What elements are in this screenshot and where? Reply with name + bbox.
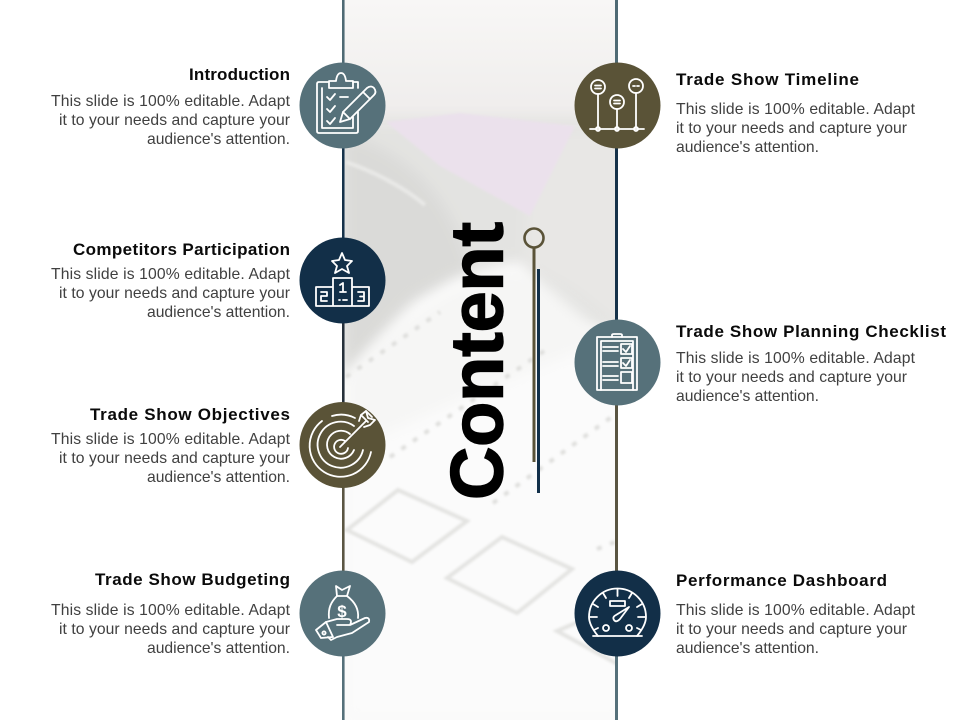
- body text: it to your needs and capture your: [676, 120, 907, 137]
- heading: Trade Show Budgeting: Trade Show Budgeting: [95, 570, 290, 589]
- heading: Trade Show Objectives: Trade Show Objectives: [90, 405, 290, 424]
- body text: audience's attention.: [676, 640, 819, 657]
- title accent: navy line: [537, 269, 540, 493]
- item: Trade Show Planning Checklist: [574, 320, 946, 406]
- body text: [51, 266, 291, 321]
- body text: it to your needs and capture your: [676, 621, 907, 638]
- item: Trade Show Timeline: [574, 62, 916, 156]
- heading: Trade Show Timeline: Trade Show Timeline: [676, 70, 859, 89]
- body text: audience's attention.: [676, 388, 819, 405]
- body text: This slide is 100% editable. Adapt: [51, 602, 291, 619]
- body text: [676, 350, 916, 405]
- item: Trade Show Objectives: [51, 402, 386, 488]
- body text: This slide is 100% editable. Adapt: [51, 266, 291, 283]
- icon: hand holding money bag: $: [337, 602, 347, 621]
- heading: Competitors Participation: Competitors Participation: [73, 240, 290, 259]
- icon: hand holding money bag: [300, 570, 386, 656]
- body text: it to your needs and capture your: [59, 285, 290, 302]
- body text: [51, 602, 291, 657]
- body text: it to your needs and capture your: [676, 369, 907, 386]
- heading: Trade Show Planning Checklist: Trade Show Planning Checklist: [676, 322, 946, 341]
- item: Trade Show Budgeting: [51, 570, 386, 657]
- icon: clipboard and pencil: [300, 62, 386, 148]
- item: Performance Dashboard: [574, 570, 916, 657]
- item: Introduction: [51, 62, 386, 148]
- icon: speedometer: [574, 570, 660, 656]
- body text: [51, 431, 291, 486]
- title: Content: Content: [436, 222, 518, 500]
- body text: This slide is 100% editable. Adapt: [676, 101, 916, 118]
- body text: it to your needs and capture your: [59, 112, 290, 129]
- title accent: ring and pin line: [524, 228, 544, 462]
- body text: This slide is 100% editable. Adapt: [51, 431, 291, 448]
- body text: audience's attention.: [147, 304, 290, 321]
- body text: This slide is 100% editable. Adapt: [51, 93, 291, 110]
- body text: audience's attention.: [147, 469, 290, 486]
- background photo panel: [345, 0, 615, 666]
- left vertical timeline line: [342, 0, 345, 720]
- heading: Performance Dashboard: Performance Dashboard: [676, 571, 887, 590]
- body text: This slide is 100% editable. Adapt: [676, 602, 916, 619]
- body text: audience's attention.: [147, 640, 290, 657]
- body text: it to your needs and capture your: [59, 621, 290, 638]
- body text: [51, 93, 291, 148]
- icon: checklist board: [574, 320, 660, 406]
- item: Competitors Participation: [51, 238, 386, 324]
- icon: target with arrow: [300, 402, 386, 488]
- body text: This slide is 100% editable. Adapt: [676, 350, 916, 367]
- right vertical timeline line: [615, 0, 618, 720]
- body text: it to your needs and capture your: [59, 450, 290, 467]
- body text: [676, 602, 916, 657]
- body text: audience's attention.: [676, 139, 819, 156]
- icon: timeline pins: [574, 62, 660, 148]
- icon: podium with star: [300, 238, 386, 324]
- body text: audience's attention.: [147, 131, 290, 148]
- heading: Introduction: Introduction: [189, 65, 290, 84]
- body text: [676, 101, 916, 156]
